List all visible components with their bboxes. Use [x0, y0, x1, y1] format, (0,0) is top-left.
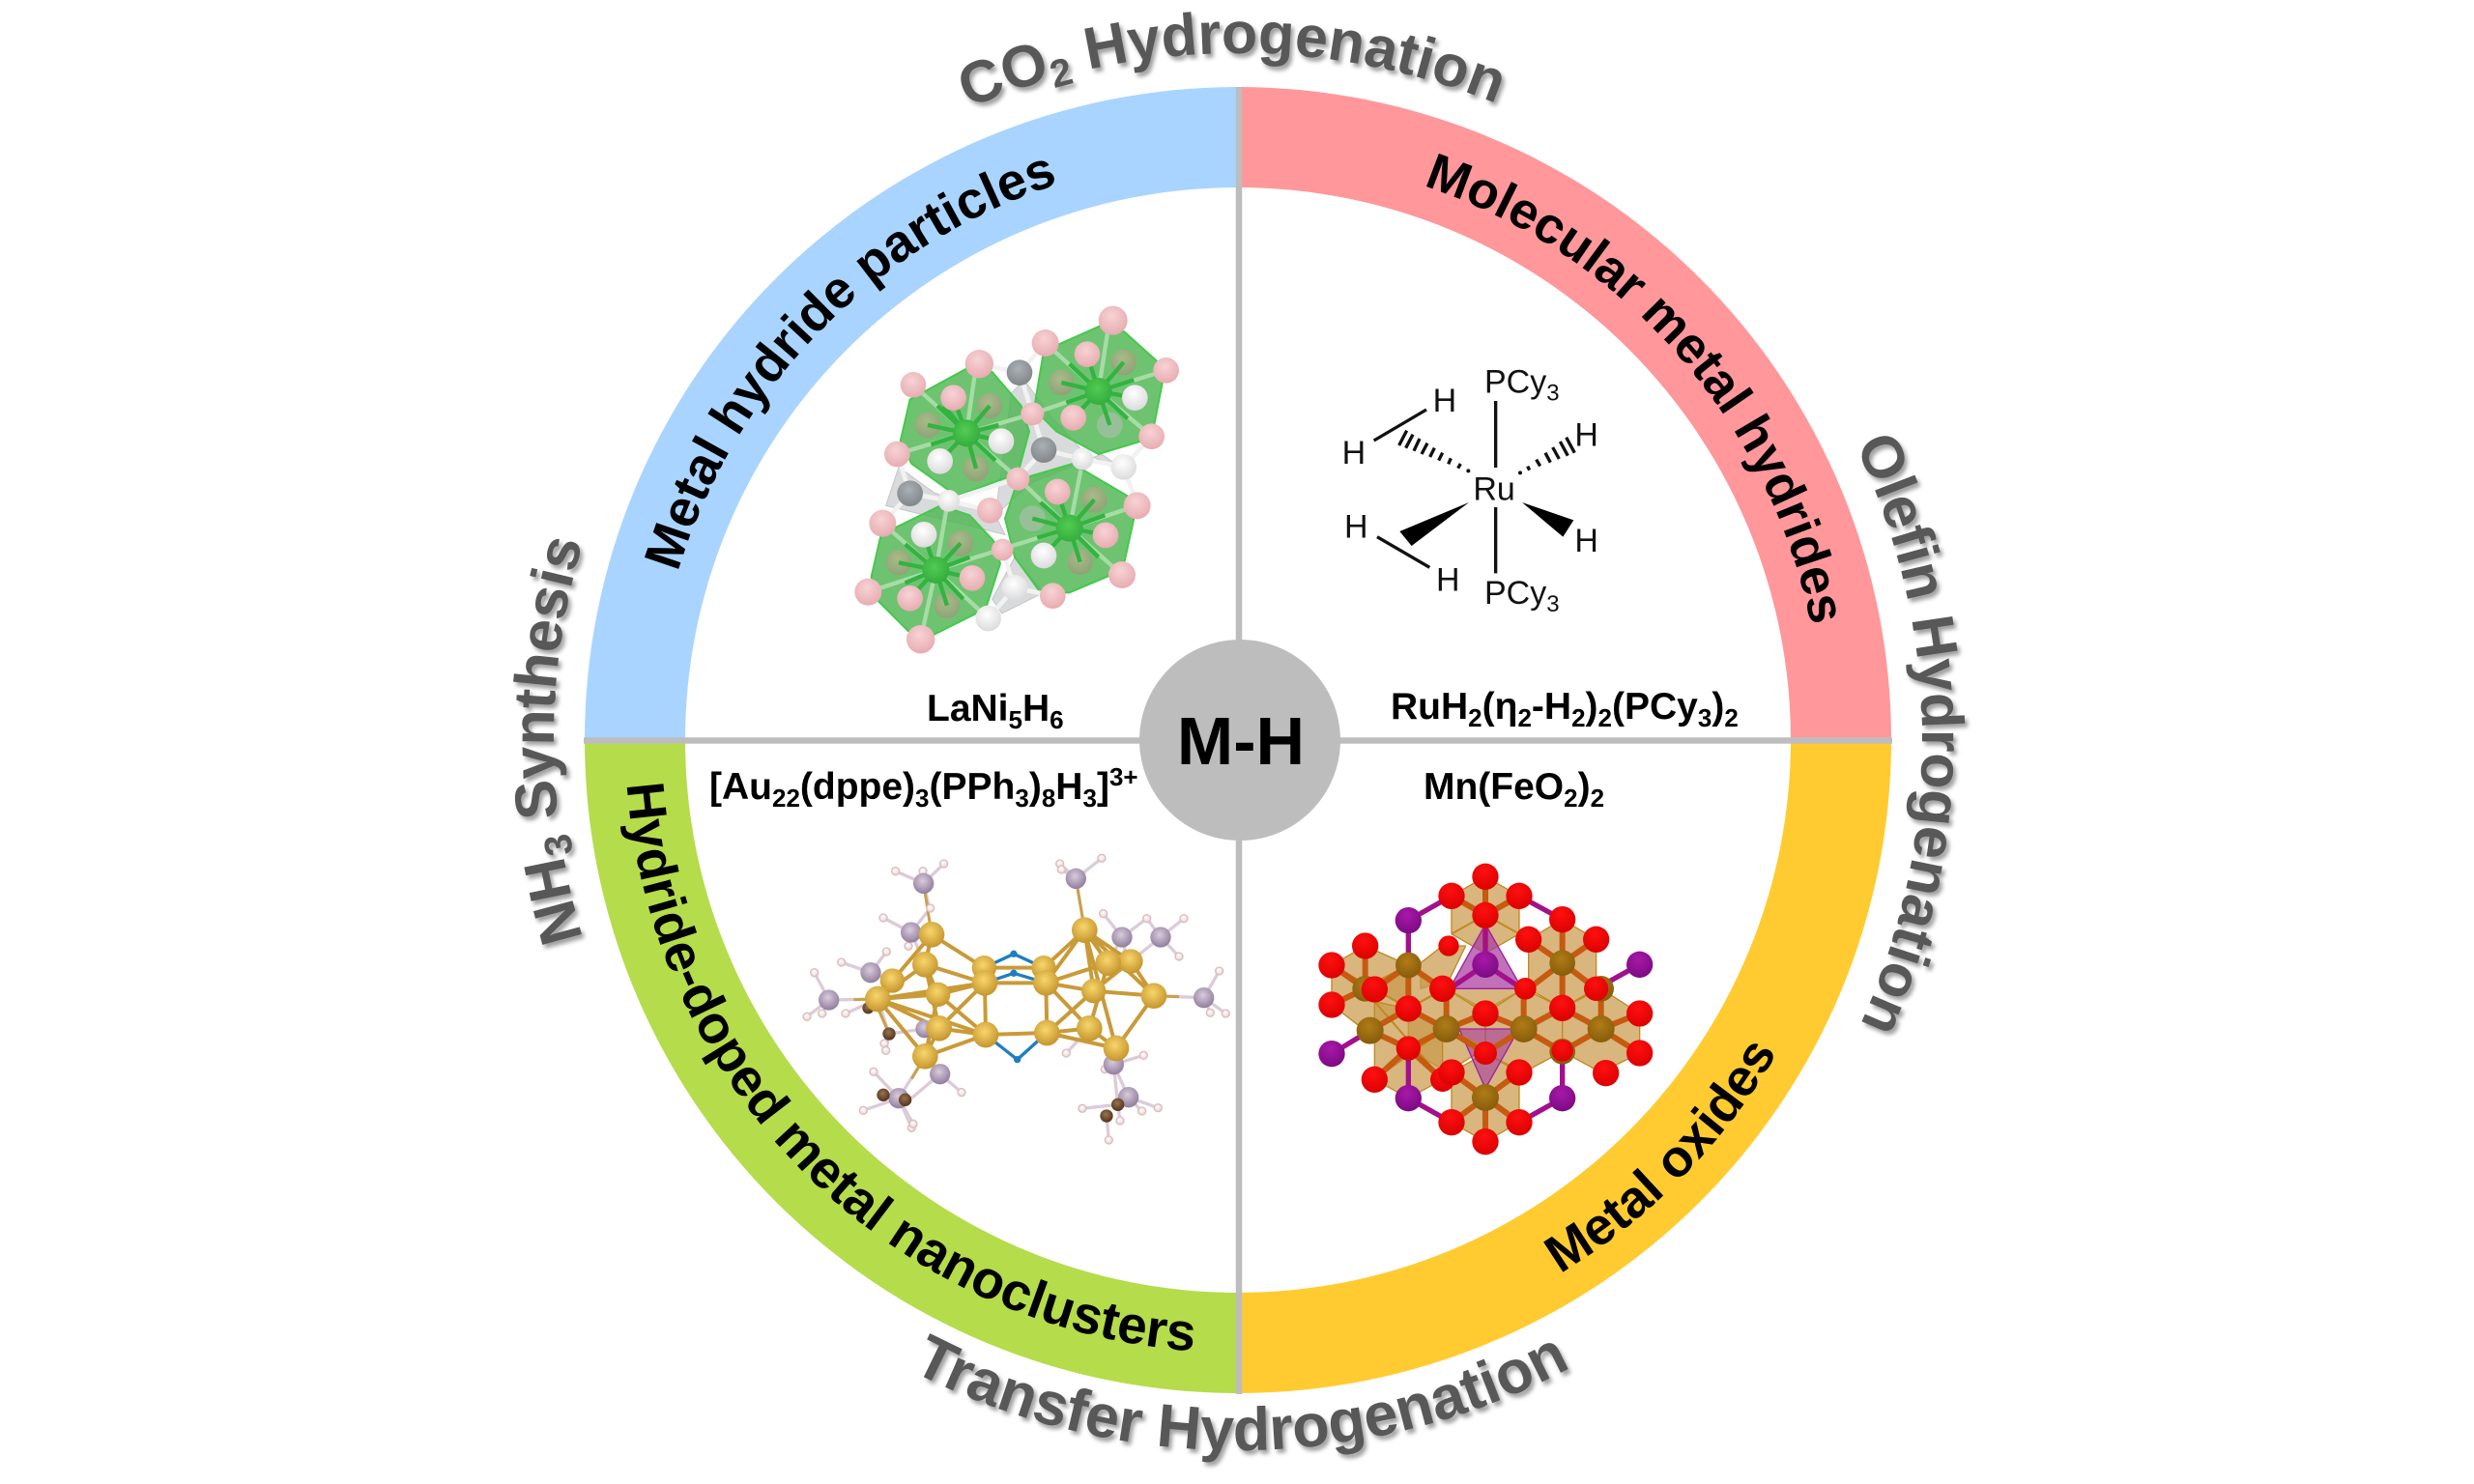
- formula: LaNi5H6: 5: [1009, 705, 1022, 734]
- hub: M-H: M-H: [1177, 703, 1305, 779]
- label: NH3 synthesis: NH: [524, 859, 587, 951]
- formula: gold nanocluster: 3: [915, 784, 930, 813]
- label: CO2 hydrogenation: [961, 12, 1508, 108]
- formula: ruthenium complex: ): [1712, 686, 1724, 728]
- segment: molecular metal hydrides: [1238, 87, 1891, 740]
- hub: M-H: [1139, 640, 1340, 841]
- structure: ruthenium complex skeletal formula: [1342, 364, 1598, 617]
- formula: ruthenium complex: 2: [1724, 703, 1739, 732]
- structure: ruthenium complex skeletal formula: Ru: [1473, 471, 1515, 507]
- label: NH3 synthesis: Synthesis: [513, 539, 586, 823]
- formula: gold nanocluster: (dppe): [800, 766, 915, 808]
- formula: ruthenium complex: (η: [1482, 686, 1517, 728]
- formula: ruthenium complex: 2: [1468, 703, 1482, 732]
- structure: Mn(FeO2)2 spinel: [1318, 864, 1653, 1155]
- formula: ruthenium complex: (PCy: [1612, 686, 1698, 728]
- structure: ruthenium complex skeletal formula: H: [1342, 435, 1366, 471]
- segment: hydride-doped metal nanoclusters: [585, 740, 1238, 1393]
- label: CO2 hydrogenation: CO: [961, 44, 1050, 108]
- structure: ruthenium complex skeletal formula: H: [1436, 562, 1460, 599]
- formula: Mn(FeO2)2: ): [1578, 766, 1591, 808]
- formula: LaNi5H6: LaNi: [927, 688, 1009, 729]
- structure: ruthenium complex skeletal formula: 3: [1546, 381, 1560, 407]
- label: transfer hydrogenation: Transfer Hydrogenation: [924, 1333, 1573, 1469]
- segment: metal oxides: [1238, 740, 1891, 1393]
- heading: metal oxides: Metal oxides: [1543, 1043, 1773, 1272]
- formula: gold nanocluster: 22: [772, 784, 800, 813]
- formula: ruthenium complex: ): [1586, 686, 1598, 728]
- formula: Mn(FeO2)2: 2: [1591, 784, 1604, 813]
- formula: gold nanocluster: [Au: [709, 766, 772, 808]
- segment: metal hydride particles: [585, 87, 1238, 740]
- formula: gold nanocluster: ): [1029, 766, 1042, 808]
- structure: ruthenium complex skeletal formula: H: [1433, 383, 1456, 419]
- label: NH3 synthesis: [513, 539, 587, 951]
- panel: central wheel: [584, 87, 1892, 1394]
- formula: ruthenium complex: RuH: [1391, 686, 1468, 728]
- formula: Mn(FeO2)2: Mn(FeO: [1424, 766, 1564, 808]
- structure: ruthenium complex skeletal formula: H: [1574, 523, 1598, 559]
- formula: gold nanocluster: H: [1055, 766, 1082, 808]
- formula: gold nanocluster: 3: [1082, 784, 1097, 813]
- formula: LaNi5H6: 6: [1050, 705, 1064, 734]
- structure: ruthenium complex skeletal formula: H: [1344, 509, 1368, 546]
- formula: gold nanocluster: 8: [1042, 784, 1055, 813]
- structure: ruthenium complex skeletal formula: H: [1574, 417, 1598, 454]
- formula: Mn(FeO2)2: 2: [1564, 784, 1578, 813]
- structure: LaNi5H6 crystal: [854, 306, 1179, 653]
- divider axes: [584, 87, 1892, 1394]
- formula: ruthenium complex: -H: [1532, 686, 1571, 728]
- label: NH3 synthesis: 3: [544, 835, 578, 862]
- heading: molecular metal hydrides: Molecular metal hydrides: [1426, 153, 1836, 622]
- formula: ruthenium complex: 2: [1517, 703, 1532, 732]
- formula: ruthenium complex: 2: [1571, 703, 1586, 732]
- label: CO2 hydrogenation: 2: [1050, 58, 1079, 94]
- label: olefin hydrogenation: Olefin Hydrogenation: [1861, 436, 1971, 1038]
- label: CO2 hydrogenation: Hydrogenation: [1084, 12, 1508, 108]
- formula: gold nanocluster: (PPh: [930, 766, 1015, 808]
- formula: gold nanocluster: 3+: [1109, 762, 1138, 791]
- formula: ruthenium complex: 2: [1598, 703, 1612, 732]
- formula: gold nanocluster: 3: [1015, 784, 1029, 813]
- structure: ruthenium complex skeletal formula: PCy: [1484, 364, 1546, 401]
- formula: gold nanocluster: ]: [1097, 766, 1109, 808]
- structure: gold hydride nanocluster: [803, 854, 1229, 1144]
- formula: ruthenium complex: 3: [1698, 703, 1712, 732]
- heading: hydride-doped metal nanoclusters: Hydride-doped metal nanoclusters: [620, 784, 1194, 1351]
- structure: ruthenium complex skeletal formula: 3: [1546, 591, 1560, 617]
- formula: LaNi5H6: H: [1022, 688, 1050, 729]
- structure: ruthenium complex skeletal formula: PCy: [1484, 575, 1546, 612]
- heading: metal hydride particles: Metal hydride particles: [645, 160, 1054, 569]
